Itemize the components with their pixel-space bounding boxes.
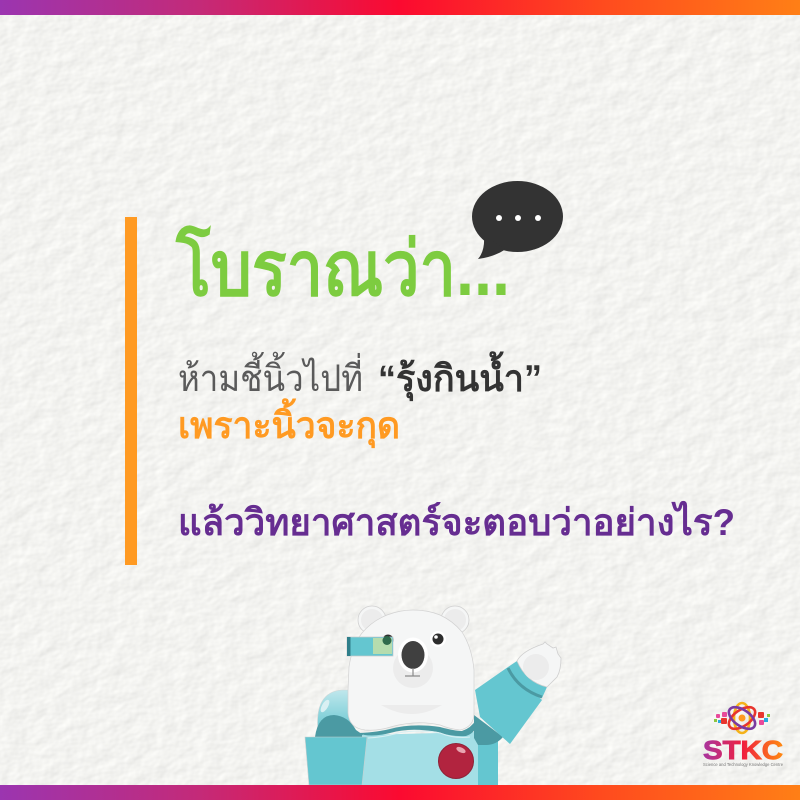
text line: do not point — [178, 351, 542, 402]
smart glass — [347, 636, 393, 656]
logo tagline: Science and Technology Knowledge Centre — [703, 762, 783, 767]
speech bubble icon — [472, 181, 563, 259]
cuff stripe — [508, 668, 542, 697]
robot shoulder dome — [318, 690, 352, 732]
mouth — [405, 668, 420, 676]
shoulder joint — [315, 715, 366, 737]
cuff — [508, 661, 547, 698]
STKC logo — [703, 703, 783, 767]
left eye — [382, 634, 394, 646]
right side panel — [478, 735, 498, 785]
collar highlight — [368, 731, 470, 738]
paw — [517, 642, 561, 687]
heading: โบราณว่า... — [175, 224, 510, 312]
top gradient bar — [0, 0, 800, 15]
nose patch — [398, 638, 428, 672]
dome highlight — [319, 698, 331, 714]
logo wordmark: STKC — [703, 735, 783, 765]
smile shade — [381, 705, 442, 714]
left chest panel — [305, 737, 367, 785]
head — [348, 610, 474, 730]
left ear — [358, 606, 386, 634]
nose — [402, 641, 424, 669]
logo atom mark — [725, 703, 759, 733]
muzzle — [393, 648, 433, 688]
bottom gradient bar — [0, 785, 800, 800]
text line: do not point: “รุ้งกินน้ำ” — [378, 351, 542, 402]
logo dots — [714, 712, 770, 725]
orange vertical accent bar — [125, 217, 137, 565]
right shoulder joint — [474, 715, 503, 745]
right eye — [430, 631, 446, 647]
torso — [362, 732, 478, 785]
text line: finger will rot: เพราะนิ้วจะกุด — [178, 398, 400, 449]
bear mascot — [305, 606, 561, 785]
right ear — [441, 606, 469, 634]
text line: do not point: ห้ามชี้นิ้วไปที่ — [178, 351, 363, 399]
raised arm — [475, 667, 542, 744]
paw pad — [523, 654, 549, 680]
red chest button — [438, 744, 474, 778]
collar — [357, 720, 476, 736]
text line: science question: แล้ววิทยาศาสตร์จะตอบว่าอย่างไร? — [178, 500, 735, 543]
